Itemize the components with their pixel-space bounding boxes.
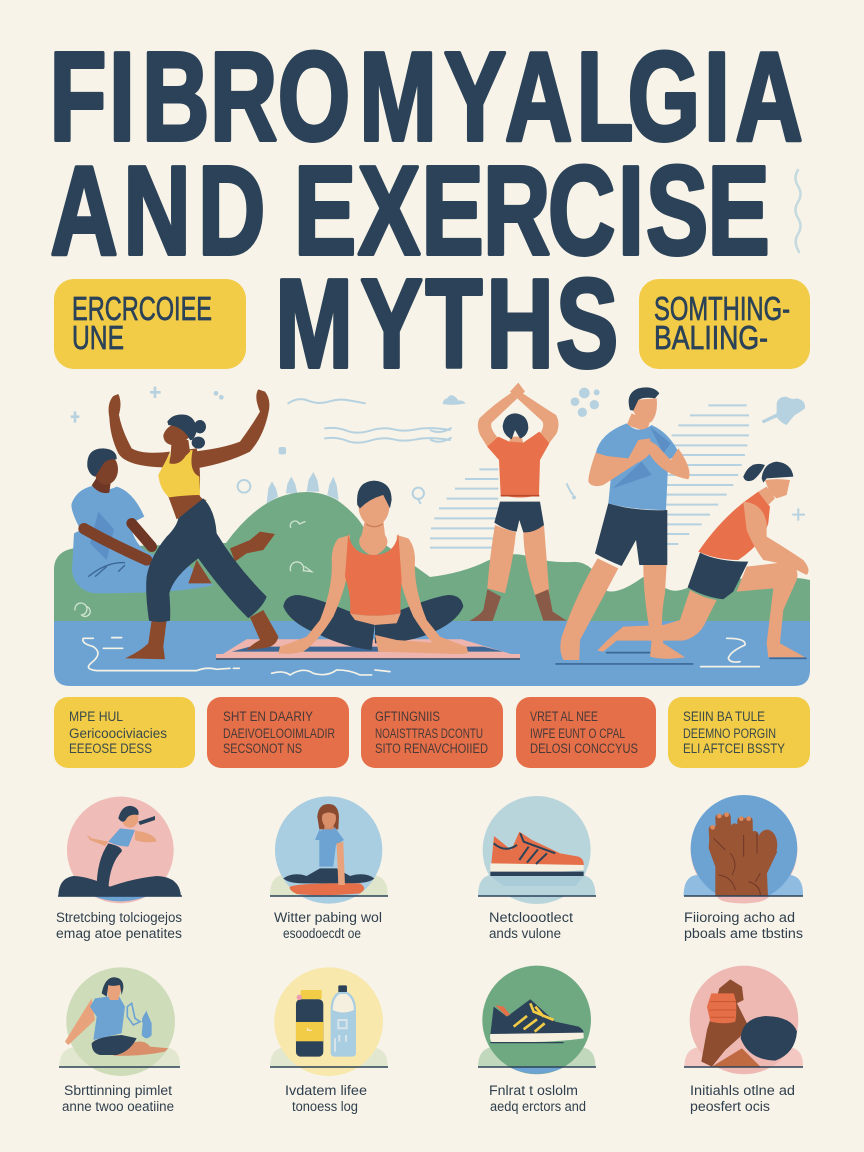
caption: eighth: peosfert ocis	[690, 1099, 770, 1114]
myth box 4	[516, 697, 656, 768]
myth box 4: VRET AL NEE	[530, 709, 598, 724]
person: woman standing with raised arms	[469, 383, 567, 621]
caption: sixth	[285, 1083, 367, 1114]
title line: FIBROMYALGIA: FIBROMYALGIA	[50, 27, 803, 167]
myth box 5	[668, 697, 810, 768]
person: standing man in blue shirt	[560, 387, 690, 660]
caption: fifth: Sbrttinning pimlet	[64, 1083, 172, 1098]
title	[50, 27, 803, 394]
icon baselines	[58, 896, 803, 1067]
caption: stretching: Stretcbing tolciogejos	[56, 910, 182, 925]
caption: seventh: aedq erctors and	[490, 1099, 586, 1114]
myth box 3: GFTINGNIIS	[375, 709, 440, 724]
caption: third column: Netcloootlect	[489, 910, 573, 925]
exercise scene illustration	[54, 383, 810, 686]
caption: seventh	[489, 1083, 586, 1114]
myth box 3: SITO RENAVCHOIIED	[375, 741, 488, 756]
caption: fifth	[62, 1083, 174, 1114]
myth box 2	[207, 697, 349, 768]
icon: seated woman on cushion	[270, 796, 388, 904]
myth box 5: DEEMNO PORGIN	[683, 726, 776, 741]
icon: supplement jar and water bottle	[270, 967, 388, 1076]
water floor	[54, 621, 810, 686]
left yellow badge	[54, 279, 246, 369]
hills	[54, 492, 810, 622]
caption: fourth column: pboals ame tbstins	[684, 926, 803, 941]
caption: third column	[489, 910, 573, 941]
myth box 1: Gericoociviacies	[69, 726, 167, 741]
person: dancing woman in yellow top	[109, 389, 278, 659]
caption: second column: esoodoecdt oe	[283, 926, 361, 941]
myth box 5: ELI AFTCEI BSSTY	[683, 741, 785, 756]
title line: AND EXERCISE: AND EXERCISE	[50, 141, 770, 281]
icon: orange running shoe	[478, 796, 595, 904]
icon: clasped hands	[684, 966, 803, 1074]
person: lunging woman	[597, 462, 809, 657]
myth box 1	[54, 697, 195, 768]
icon: raised hands	[684, 795, 803, 903]
right yellow badge	[639, 279, 810, 369]
caption: sixth: Ivdatem lifee	[285, 1083, 367, 1098]
caption: eighth: Initiahls otlne ad	[690, 1083, 795, 1098]
icon: stretching woman	[58, 797, 181, 903]
myth box 3: NOAISTTRAS DCONTU	[375, 726, 483, 741]
left yellow badge: ERCRCOIEE	[72, 290, 212, 327]
myth box 5: SEIIN BA TULE	[683, 709, 765, 724]
myth box 4: IWFE EUNT O CPAL	[530, 726, 625, 741]
myth box 4: DELOSI CONCCYUS	[530, 741, 638, 756]
myth box 3	[361, 697, 503, 768]
icon: navy sneaker	[478, 966, 595, 1074]
myth box 1: EEEOSE DESS	[69, 741, 152, 756]
water ripples	[75, 521, 390, 675]
myth box 2: SECSONOT NS	[223, 741, 302, 756]
myth box 2: DAEIVOELOOIMLADIR	[223, 726, 335, 741]
caption: eighth	[690, 1083, 795, 1114]
caption: second column	[274, 910, 382, 941]
person: seated man in blue shirt	[71, 448, 213, 593]
right yellow badge: SOMTHING-	[654, 290, 790, 327]
caption: fifth: anne twoo oeatiine	[62, 1099, 174, 1114]
background decorations	[71, 387, 450, 504]
caption: fourth column: Fiioroing acho ad	[684, 910, 795, 925]
decorative squiggle	[796, 170, 800, 252]
icon: seated woman with bottle	[59, 967, 180, 1076]
caption: stretching	[56, 910, 182, 941]
caption: seventh: Fnlrat t oslolm	[489, 1083, 578, 1098]
myth box 2: SHT EN DAARIY	[223, 709, 313, 724]
myth box 1: MPE HUL	[69, 709, 123, 724]
caption: fourth column	[684, 910, 803, 941]
yoga mat	[216, 639, 520, 659]
caption: sixth: tonoess log	[292, 1099, 358, 1114]
person: seated woman in orange tank	[278, 481, 468, 654]
title line: MYTHS: MYTHS	[275, 254, 618, 394]
caption: stretching: emag atoe penatites	[56, 926, 182, 941]
left yellow badge: UNE	[72, 319, 124, 356]
caption: second column: Witter pabing wol	[274, 910, 382, 925]
caption: third column: ands vulone	[489, 926, 561, 941]
right yellow badge: BALIING-	[654, 319, 768, 356]
